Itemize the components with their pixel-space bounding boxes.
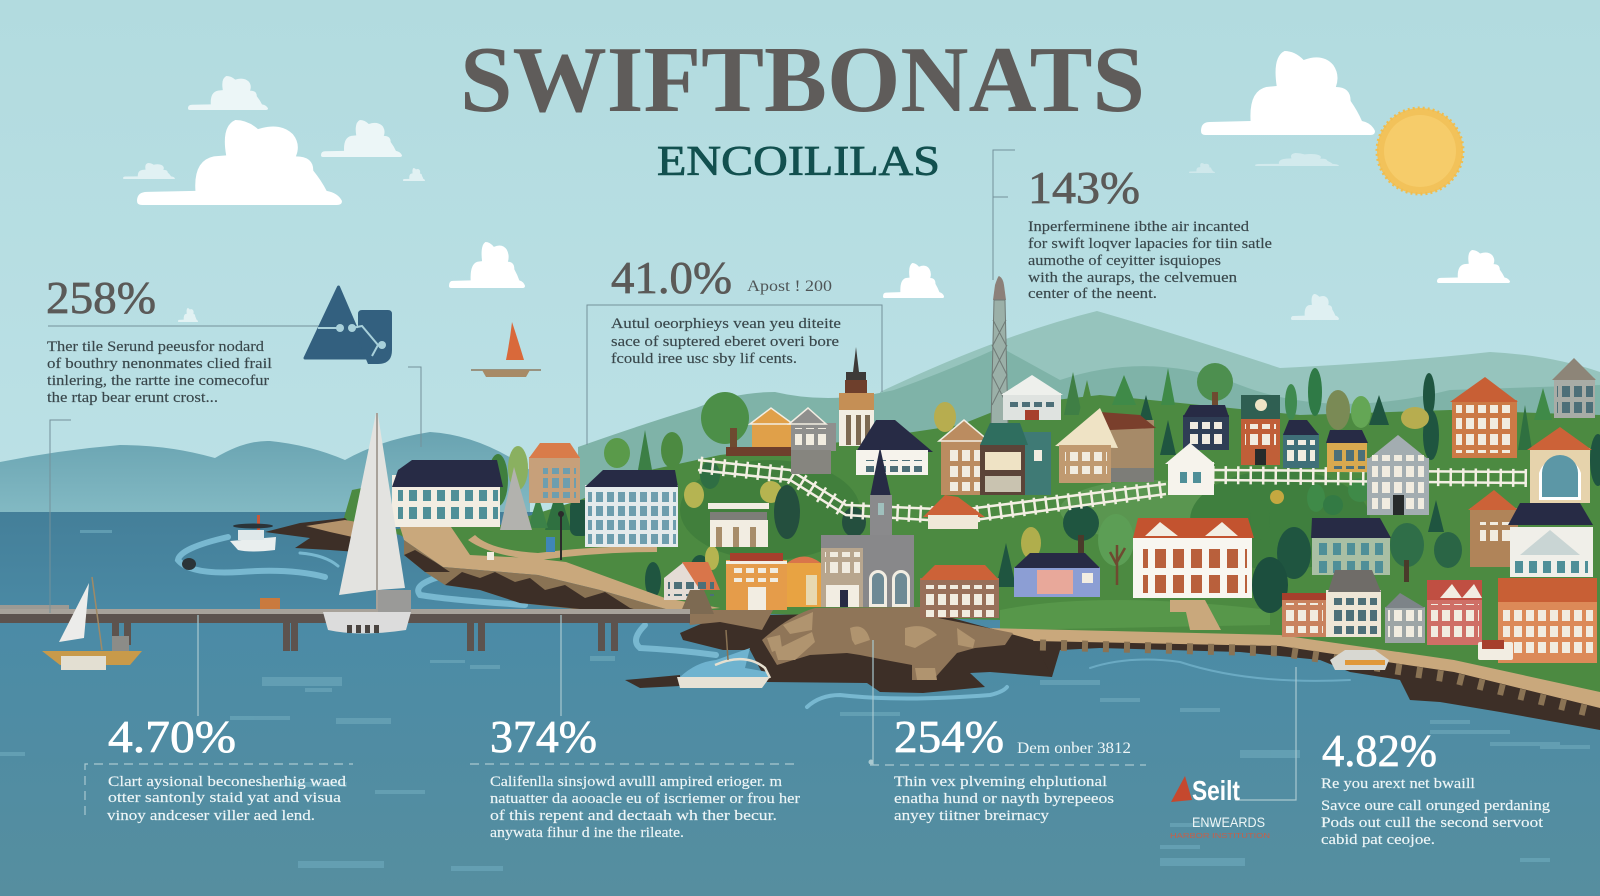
stat: 143%: Inperferminene ibthe air incanted [1028, 219, 1250, 235]
stat: 482%: Re you arext net bwaill [1321, 776, 1475, 792]
left distant hills [0, 432, 530, 512]
stat: 482%: 4.82% [1322, 725, 1437, 776]
stat: 482%: Savce oure call orunged perdaning [1321, 798, 1551, 814]
trees [488, 363, 1600, 613]
stat: 143%: center of the neent. [1028, 286, 1157, 302]
stat: 254%: Thin vex plveming ehplutional [894, 774, 1107, 790]
logo: ENWEARDS [1192, 814, 1265, 830]
stat: 374%: 374% [490, 711, 597, 762]
stat: 374%: natuatter da aooacle eu of iscriemer or frou her [490, 791, 800, 807]
sky background [0, 0, 1600, 520]
stat: 41.0%: Autul oeorphieys vean yeu diteite [611, 316, 841, 332]
stat: 258%: the rtap bear erunt crost... [47, 390, 218, 406]
pier [0, 598, 690, 651]
buildings: church and townhouses [726, 447, 999, 618]
stat: 254%: enatha hund or nayth byrepeeos [894, 791, 1114, 807]
stat: 41.0%: 41.0% [611, 252, 732, 303]
buildings: central hill [726, 347, 989, 529]
central rock [625, 607, 1052, 693]
stat: 374% [470, 711, 800, 841]
logo: HARBOR INSTITUTION [1170, 833, 1270, 840]
stat: 482%: cabid pat ceojoe. [1321, 832, 1435, 848]
stat: 143%: with the auraps, the celvemuen [1028, 270, 1238, 286]
white fence [698, 460, 1527, 522]
stat: 4.70%: Clart aysional beconesherhig waed [108, 774, 347, 790]
stat: 374%: of this repent and dectaah wh ther becur. [490, 808, 777, 824]
lamp and sign details [487, 511, 564, 560]
stat: 143%: for swift loqver lapacies for tiin satle [1028, 236, 1272, 252]
harbour boat [677, 630, 770, 688]
icon: triangle network [305, 287, 392, 364]
stat: 258%: Ther tile Serund peeusfor nodard [47, 339, 265, 355]
stat: 143%: 143% [1028, 162, 1140, 213]
small sailboat [42, 577, 142, 670]
connector lines [50, 150, 1015, 613]
stat: 41.0%: Apost ! 200 [747, 278, 832, 295]
stat: 4.70%: otter santonly staid yat and visua [108, 790, 341, 806]
water ripples [0, 530, 1590, 871]
stat: 258%: 258% [46, 272, 156, 323]
stat: 143% [1028, 162, 1272, 302]
water swirls [178, 537, 1350, 707]
stat: 258% [46, 272, 320, 406]
subtitle: ENCOILILAS [657, 139, 940, 185]
stat: 41.0% [587, 252, 882, 445]
stat: 41.0%: sace of suptered eberet overi bore [611, 334, 839, 350]
right distant hills [578, 311, 1600, 520]
clouds [123, 51, 1510, 322]
stat: 258%: tinlering, the rartte ine comecofur [47, 373, 269, 389]
large sailboat [323, 413, 411, 634]
coast: right shore [985, 628, 1600, 730]
stat: 4.70%: vinoy andceser viller aed lend. [107, 808, 315, 824]
coast: left shore [265, 518, 720, 612]
stat: 4.70% [85, 711, 353, 824]
stat: 374%: anywata fihur d ine the rileate. [490, 825, 684, 841]
stat: 254%: anyey tiitner breirnacy [894, 808, 1050, 824]
stat: 374%: Califenlla sinsjowd avulll ampired erioger. m [490, 774, 782, 790]
village land [343, 395, 1600, 700]
buildings: waterfront west [392, 443, 769, 614]
water connector lines [198, 615, 1296, 800]
stat: 258%: of bouthry nenonmates clied frail [47, 356, 272, 372]
distant tower [991, 276, 1008, 425]
title: SWIFTBONATS [460, 28, 1145, 132]
logo: Seilt [1192, 775, 1240, 806]
white motor boat [182, 515, 276, 570]
stat: 254% [870, 711, 1146, 824]
icon: sun [1377, 108, 1463, 194]
stat: 4.70%: 4.70% [108, 711, 236, 762]
buildings: lower east [1014, 490, 1597, 670]
stat: 143%: aumothe of ceyitter isquiopes [1028, 253, 1221, 269]
stat: 254%: Dem onber 3812 [1017, 740, 1131, 757]
buildings: upper east [980, 358, 1596, 515]
stat: 254%: 254% [894, 711, 1004, 762]
sea [0, 512, 1600, 896]
stat: 482%: Pods out cull the second servoot [1321, 815, 1544, 831]
stat: 482% [1321, 725, 1551, 848]
distant sailing ship [471, 322, 541, 377]
stat: 41.0%: fcould iree usc sby lif cents. [611, 351, 797, 367]
logo [1170, 775, 1270, 840]
